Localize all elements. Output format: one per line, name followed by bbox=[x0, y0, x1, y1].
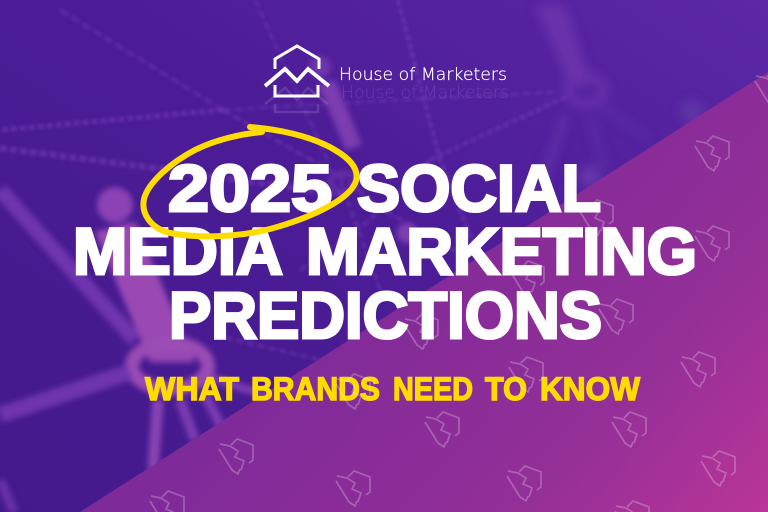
title line 2: MEDIA bbox=[73, 214, 283, 288]
logo reflection: House of Marketers bbox=[341, 83, 509, 103]
person figures bbox=[0, 56, 417, 512]
title bbox=[73, 151, 697, 352]
diagonal magenta panel bbox=[80, 72, 768, 512]
subtitle: KNOW bbox=[540, 371, 641, 407]
title line 2: MARKETING bbox=[306, 214, 697, 288]
dashed connection lines bbox=[0, 0, 570, 360]
logo reflection bbox=[265, 83, 509, 112]
pattern of faint logo icons bbox=[150, 71, 768, 512]
icon: house logo bbox=[265, 46, 329, 96]
subtitle: WHAT bbox=[145, 371, 239, 407]
title line 1: 2025 bbox=[168, 151, 332, 225]
subtitle: TO bbox=[485, 371, 527, 407]
title line 1: SOCIAL bbox=[357, 151, 601, 225]
logo bbox=[265, 46, 509, 112]
hand-drawn yellow circle bbox=[143, 127, 357, 236]
brand name: House of Marketers bbox=[339, 65, 507, 85]
subtitle: BRANDS bbox=[251, 371, 380, 407]
title line 3: PREDICTIONS bbox=[169, 278, 602, 352]
distant figure bbox=[535, 5, 704, 190]
subtitle: NEED bbox=[393, 371, 473, 407]
